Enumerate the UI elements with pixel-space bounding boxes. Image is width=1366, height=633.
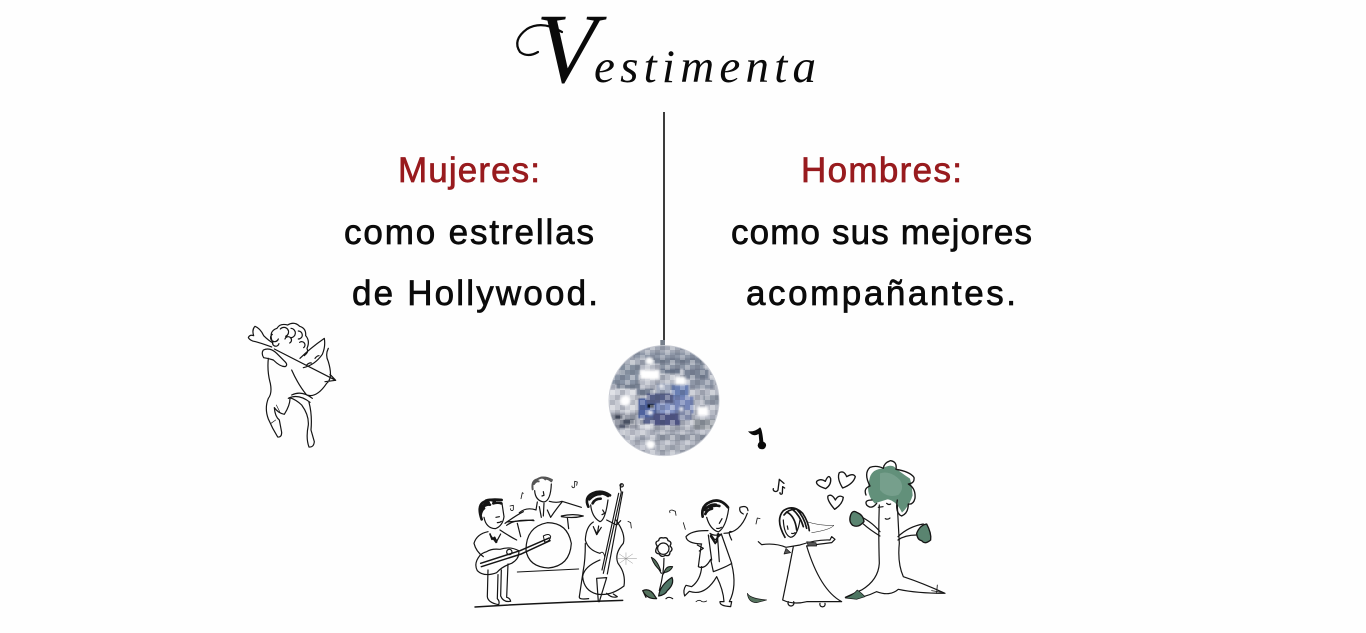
double bass [602, 484, 623, 574]
drummer [505, 477, 583, 568]
title [517, 0, 816, 104]
cupid wing and bow [274, 338, 336, 402]
bass drum [526, 523, 571, 568]
note pair [773, 479, 785, 494]
text block: hombres [731, 151, 1032, 313]
disco ball highlights [620, 357, 708, 449]
illustration: dancers and tree [670, 461, 945, 607]
heading: mujeres: Mujeres: [398, 151, 540, 190]
dancing groom [670, 501, 760, 607]
icon: disco ball [603, 340, 723, 457]
icon: cupid [248, 323, 336, 447]
divider cord [663, 112, 665, 342]
tree hands [850, 511, 864, 526]
line: como sus mejores: como sus mejores [731, 213, 1032, 252]
bride [747, 508, 842, 607]
icon: music note [748, 427, 766, 449]
illustration: band [474, 477, 673, 607]
line: acompañantes: acompañantes. [746, 274, 1016, 313]
text block: mujeres [344, 151, 598, 313]
line: de Hollywood: de Hollywood. [352, 274, 598, 313]
line: como estrellas: como estrellas [344, 213, 594, 252]
tree [845, 461, 945, 599]
cupid left wing [248, 326, 273, 347]
dancing flower [643, 538, 673, 599]
floor line [475, 600, 623, 607]
bassist [579, 484, 637, 602]
guitarist [474, 500, 551, 605]
cupid body [262, 349, 314, 447]
guitar [476, 548, 519, 575]
notes [510, 481, 577, 511]
tree foliage [868, 466, 913, 513]
heading: hombres: Hombres: [801, 151, 962, 190]
title: estimenta [594, 41, 816, 93]
cupid curls [271, 323, 308, 356]
hearts [816, 472, 855, 509]
